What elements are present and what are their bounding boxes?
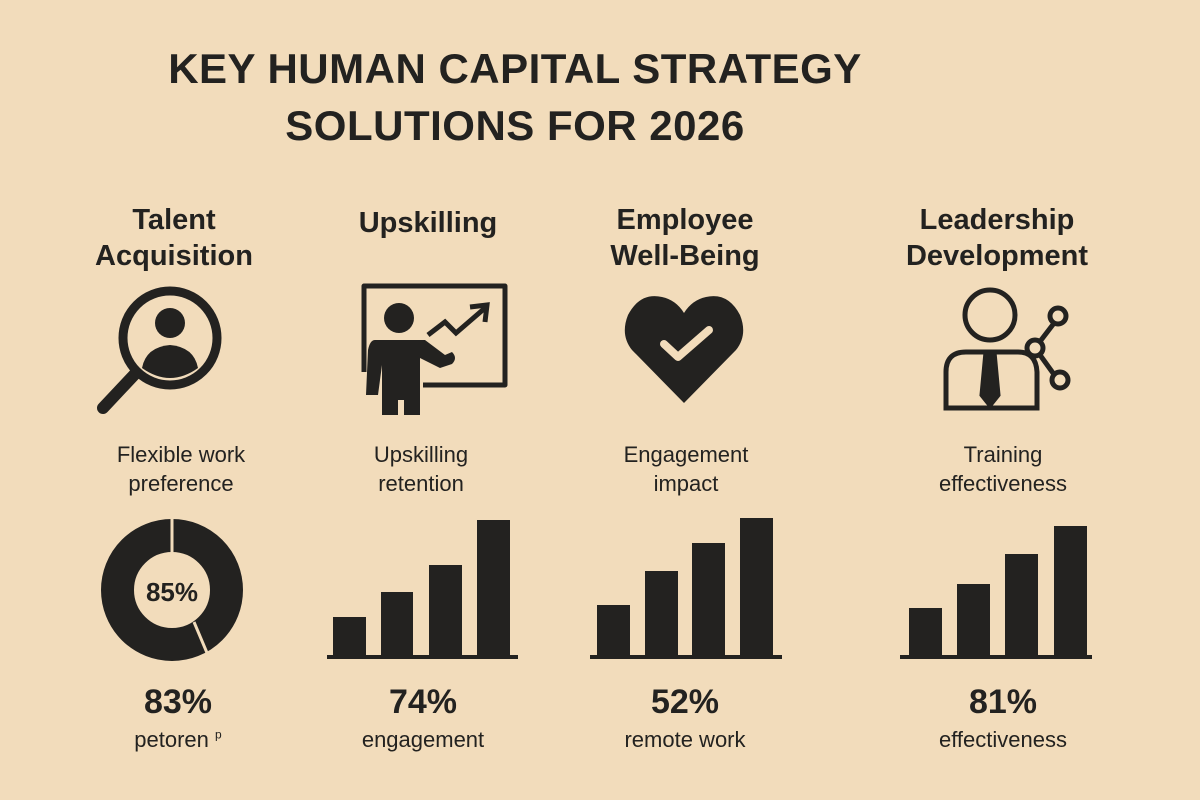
label: flexible work	[117, 442, 246, 496]
heading: employee well-being: Well-Being	[610, 240, 760, 272]
label: training effectiveness: Training	[964, 442, 1042, 467]
heading: leadership development	[906, 204, 1088, 272]
title: KEY HUMAN CAPITAL STRATEGY	[168, 45, 862, 92]
bar chart: well-being	[590, 518, 782, 659]
label: upskilling retention: retention	[378, 471, 464, 496]
stat: 81%: 81%	[969, 683, 1037, 721]
label: training effectiveness	[939, 442, 1067, 496]
label: engagement impact	[624, 442, 748, 496]
label: upskilling retention	[374, 442, 468, 496]
donut chart: 85%: 85%	[146, 577, 198, 607]
stat: 74%: 74%	[389, 683, 457, 721]
title: SOLUTIONS FOR 2026	[285, 102, 745, 149]
sub: engagement: engagement	[362, 727, 484, 752]
heading: leadership development: Leadership	[920, 204, 1074, 236]
heading: upskilling: Upskilling	[359, 207, 497, 239]
heading: talent acquisition: Acquisition	[95, 240, 253, 272]
donut chart: 85%	[118, 515, 226, 660]
icon: leader with network	[946, 290, 1068, 408]
sub: petoren: petoren p	[134, 727, 222, 752]
sub: effectiveness: effectiveness	[939, 727, 1067, 752]
label: training effectiveness: effectiveness	[939, 471, 1067, 496]
heading: leadership development: Development	[906, 240, 1088, 272]
heading: employee well-being	[610, 204, 760, 272]
heading: employee well-being: Employee	[616, 204, 754, 236]
label: flexible work: Flexible work	[117, 442, 245, 467]
icon: presenter with chart	[364, 286, 505, 415]
stat: 83%: 83%	[144, 683, 212, 721]
label: flexible work: preference	[128, 471, 234, 496]
label: engagement impact: Engagement	[624, 442, 748, 467]
icon: heart with check	[625, 296, 743, 403]
heading: talent acquisition: Talent	[132, 204, 216, 236]
bar chart: upskilling	[327, 520, 518, 659]
label: upskilling retention: Upskilling	[374, 442, 468, 467]
heading: talent acquisition	[95, 204, 253, 272]
sub: remote work: remote work	[624, 727, 746, 752]
label: engagement impact: impact	[654, 471, 718, 496]
bar chart: leadership	[900, 526, 1092, 659]
stat: 52%: 52%	[651, 683, 719, 721]
title	[168, 45, 862, 149]
icon: magnifier with person	[103, 291, 217, 408]
